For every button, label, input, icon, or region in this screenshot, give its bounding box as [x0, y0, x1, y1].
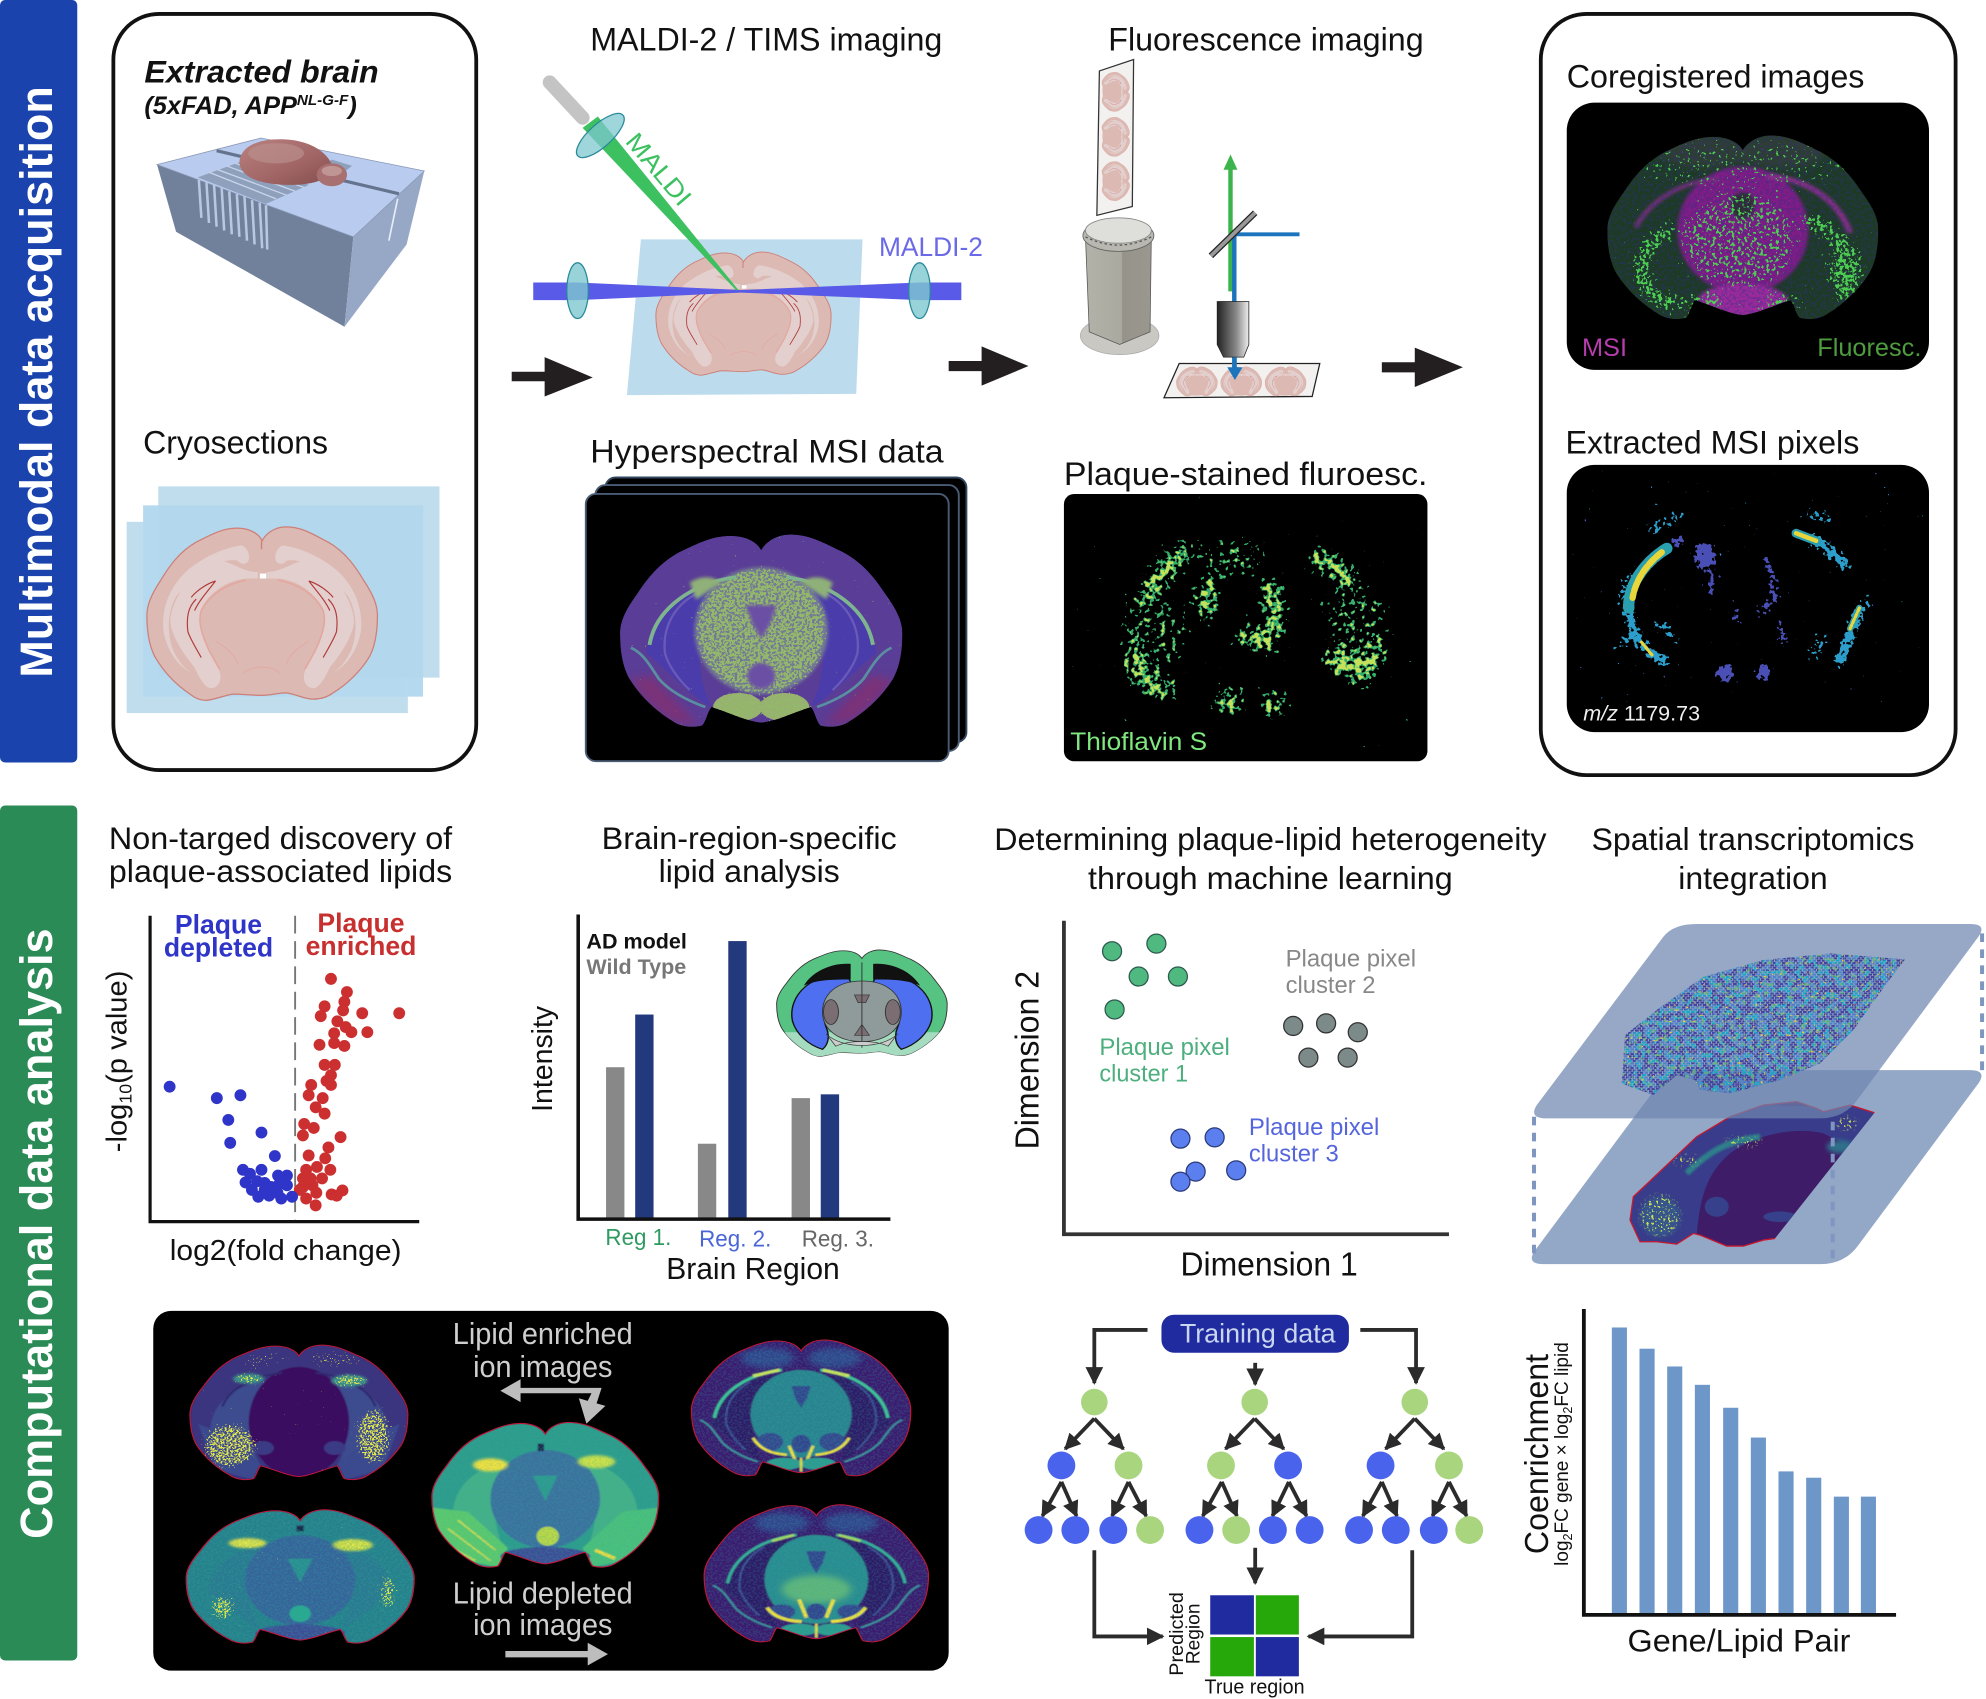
- image: upper spatial transcriptomics spots: [1622, 954, 1905, 1095]
- heading: spatial transcriptomics integration: Spatial transcriptomics: [1591, 821, 1914, 857]
- heading: plaque-lipid heterogeneity: [994, 821, 1547, 896]
- heading: extracted brain: Extracted brain: [144, 53, 379, 89]
- labels: plaque enriched: enriched: [306, 931, 416, 961]
- chart: confusion matrix: [1167, 1592, 1305, 1698]
- x axis label: Dimension 1: [1180, 1245, 1358, 1282]
- icon: brain in slicing matrix: [157, 138, 424, 327]
- tree 1: [1025, 1389, 1164, 1544]
- heading: cryosections: Cryosections: [143, 424, 328, 460]
- chart: volcano plot: [102, 908, 419, 1267]
- panel: multimodal data acquisition sidebar: [0, 0, 77, 762]
- chart: cluster scatter: [1009, 921, 1449, 1282]
- label: lipid depleted ion images: Lipid depleted: [453, 1576, 633, 1610]
- diagram: fluorescence microscope: [1080, 60, 1320, 398]
- arrows: trees to confusion matrix: [1094, 1548, 1412, 1636]
- heading: coregistered images: Coregistered images: [1567, 58, 1864, 94]
- y axis sublabel: FC gene × log: [1552, 1414, 1573, 1533]
- points: cluster 2: [1284, 1014, 1367, 1067]
- icon: brain region atlas: [777, 950, 947, 1059]
- icon: microscope slide with sections: [1164, 364, 1320, 398]
- x axis label: log2(fold change): [170, 1235, 402, 1267]
- arrow: depleted ion images: [505, 1643, 608, 1666]
- diagram: MALDI-2 imaging optics: [533, 82, 983, 395]
- icon: vertical slide: [1097, 60, 1134, 215]
- label: lipid depleted ion images: ion images: [473, 1608, 612, 1642]
- y axis label: Intensity: [527, 1005, 559, 1112]
- label: true region: True region: [1205, 1676, 1305, 1698]
- category labels: Reg. 2.: [699, 1225, 771, 1251]
- y axis sublabel: 2: [1561, 1533, 1575, 1540]
- label: cluster 1: [1099, 1034, 1230, 1088]
- label: predicted region: Region: [1183, 1603, 1204, 1664]
- labels: plaque depleted: depleted: [164, 932, 273, 962]
- icon: slide jar: [1080, 218, 1159, 355]
- category labels: [605, 1224, 874, 1251]
- label: cluster 3: cluster 3: [1249, 1140, 1339, 1167]
- label: lipid enriched ion images: ion images: [473, 1350, 612, 1384]
- labels: plaque enriched: [306, 908, 416, 961]
- image: coregistered MSI and fluorescence: [1567, 103, 1929, 370]
- panel: extracted brain and cryosections: [113, 14, 476, 770]
- heading: fluorescence imaging: Fluorescence imaging: [1108, 22, 1424, 58]
- image stack: hyperspectral MSI: [586, 478, 966, 761]
- heading: spatial transcriptomics integration: integration: [1678, 860, 1828, 896]
- chart: coenrichment bars: [1518, 1309, 1896, 1659]
- label: cluster 2: Plaque pixel: [1286, 945, 1416, 972]
- plane: upper tissue layer: [1534, 924, 1981, 1118]
- icon: objective and beam path: [1211, 155, 1300, 380]
- text: mouse models: ): [345, 92, 357, 120]
- image: ion map bottom left: [186, 1510, 414, 1644]
- image: ion map center: [432, 1422, 659, 1568]
- heading: plaque-stained fluorescence: Plaque-stained fluroesc.: [1064, 456, 1427, 492]
- y axis label: (p value): [102, 971, 134, 1084]
- tree 3: [1345, 1389, 1483, 1544]
- image: ion map top left: [190, 1345, 408, 1481]
- label: cluster 3: Plaque pixel: [1249, 1114, 1379, 1141]
- box: training data: [1161, 1315, 1349, 1353]
- heading: spatial transcriptomics integration: [1591, 821, 1914, 896]
- label: cluster 2: [1286, 945, 1416, 999]
- heading: hyperspectral MSI data: Hyperspectral MSI data: [590, 433, 944, 469]
- y axis label: 10: [116, 1084, 136, 1104]
- label: MALDI: MALDI: [620, 128, 697, 212]
- points: cluster 1: [1103, 934, 1187, 1019]
- label: MALDI-2: MALDI-2: [879, 232, 983, 262]
- arrows: training data to trees: [1094, 1330, 1416, 1384]
- label: lipid enriched ion images: [453, 1317, 633, 1384]
- arrow: to fluorescence imaging: [949, 346, 1028, 386]
- label: cluster 2: cluster 2: [1286, 972, 1376, 999]
- heading: brain-region-specific lipid analysis: [602, 821, 897, 889]
- label: lipid enriched ion images: Lipid enriched: [453, 1317, 633, 1351]
- label: cluster 1: Plaque pixel: [1099, 1034, 1230, 1061]
- image: ion map bottom right: [704, 1505, 928, 1643]
- category labels: Reg 1.: [605, 1224, 671, 1250]
- text: mouse models: NL-G-F: [297, 92, 349, 109]
- arrow: to MALDI imaging: [512, 357, 593, 396]
- y axis sublabel: FC lipid: [1552, 1342, 1573, 1407]
- points: plaque depleted: [164, 1081, 298, 1204]
- labels: plaque depleted: [164, 909, 273, 962]
- category labels: Reg. 3.: [802, 1225, 874, 1251]
- label: predicted region: Predicted: [1167, 1592, 1188, 1676]
- heading: extracted MSI pixels: Extracted MSI pixels: [1565, 424, 1859, 460]
- dashed connectors: [1534, 933, 1982, 1261]
- label: Fluoresc.: Fluoresc.: [1817, 334, 1921, 362]
- legend: AD model: AD model: [586, 930, 687, 954]
- plane: lower tissue layer: [1532, 1070, 1981, 1264]
- panel: computational data analysis sidebar: Computational data analysis: [11, 928, 62, 1539]
- heading: plaque-lipid heterogeneity: through machine learning: [1088, 860, 1453, 896]
- image: ion map top right: [692, 1340, 911, 1477]
- x axis label: Brain Region: [666, 1252, 840, 1286]
- y axis label: -log: [102, 1104, 134, 1152]
- x axis label: Gene/Lipid Pair: [1628, 1623, 1851, 1659]
- label: cluster 1: cluster 1: [1099, 1061, 1188, 1088]
- label: cluster 3: [1249, 1114, 1379, 1167]
- text: mouse models: (5xFAD, APP: [144, 92, 297, 120]
- heading: MALDI-2 TIMS imaging: MALDI-2 / TIMS imaging: [590, 22, 942, 58]
- panel: coregistered images and extracted pixels: [1541, 14, 1956, 775]
- labels: plaque depleted: Plaque: [175, 909, 262, 939]
- panel: multimodal data acquisition sidebar: Multimodal data acquisition: [11, 86, 62, 678]
- heading: non-targeted discovery: [109, 821, 453, 889]
- panel: lipid ion images: [153, 1311, 949, 1671]
- chart: regional intensity bars: [527, 914, 947, 1286]
- heading: non-targeted discovery: Non-targed discovery of: [109, 821, 453, 856]
- image: lower brain section: [1627, 1100, 1877, 1248]
- heading: brain-region-specific lipid analysis: Brain-region-specific: [602, 821, 897, 856]
- tree 2: [1186, 1389, 1324, 1544]
- image: thioflavin S plaques: [1064, 494, 1427, 761]
- arrow: enriched ion images: [500, 1379, 605, 1424]
- points: plaque enriched: [294, 973, 405, 1211]
- image: extracted MSI pixels: [1567, 465, 1929, 732]
- labels: plaque enriched: Plaque: [317, 908, 405, 938]
- arrow: to coregistered images: [1382, 348, 1463, 387]
- label: lipid depleted ion images: [453, 1576, 633, 1642]
- y axis label: Coenrichment: [1518, 1354, 1555, 1554]
- label: MSI: MSI: [1582, 334, 1627, 362]
- icon: stacked cryosection slides: [127, 486, 440, 713]
- heading: non-targeted discovery: plaque-associated lipids: [109, 854, 452, 889]
- label: predicted region: [1167, 1592, 1204, 1676]
- diagram: random forest: [1025, 1315, 1483, 1698]
- y axis sublabel: 2: [1561, 1407, 1575, 1414]
- diagram: spatial transcriptomics layers: [1532, 924, 1982, 1264]
- heading: brain-region-specific lipid analysis: lipid analysis: [659, 854, 840, 889]
- legend: wild type: Wild Type: [586, 955, 686, 979]
- label: m/z value: m/z 1179.73: [1583, 702, 1700, 726]
- box: training data: Training data: [1180, 1319, 1336, 1349]
- y axis sublabel: log: [1552, 1540, 1573, 1566]
- heading: plaque-lipid heterogeneity: Determining plaque-lipid heterogeneity: [994, 821, 1547, 857]
- points: cluster 3: [1171, 1128, 1246, 1191]
- panel: computational data analysis sidebar: [0, 806, 77, 1660]
- y axis label: Dimension 2: [1009, 971, 1046, 1149]
- label: Thioflavin S: Thioflavin S: [1070, 728, 1207, 756]
